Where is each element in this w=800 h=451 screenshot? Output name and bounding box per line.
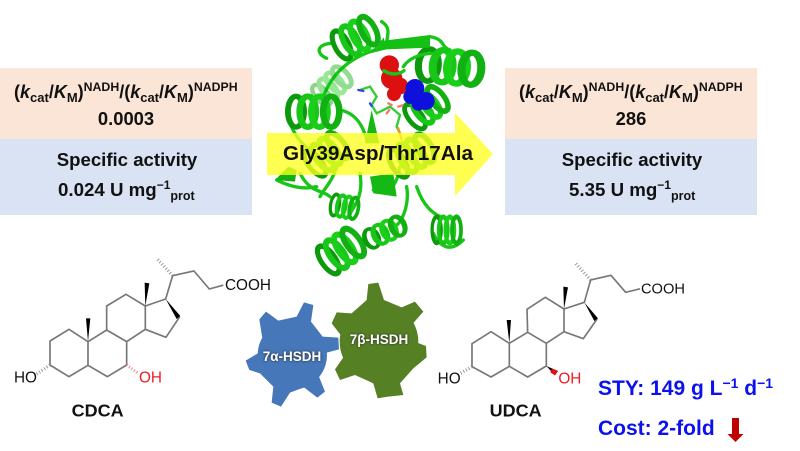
wild-type activity value: −1 xyxy=(157,178,171,192)
icon: down arrow xyxy=(728,418,744,442)
mutant selectivity ratio label: / xyxy=(554,82,559,102)
7α-HSDH label: 7α-HSDH xyxy=(263,349,321,364)
molecule: CDCA: COOH xyxy=(225,277,271,294)
callout: space-time yield: STY: 149 g L xyxy=(598,377,722,400)
mutant selectivity value: 286 xyxy=(616,108,646,129)
panel: wild-type specific activity xyxy=(0,139,252,215)
mutation arrow xyxy=(267,113,493,196)
panel: mutant specific activity xyxy=(505,139,757,215)
callout: space-time yield: −1 xyxy=(757,375,773,391)
ligand sticks xyxy=(358,87,403,140)
wild-type selectivity ratio label: K xyxy=(54,82,69,102)
panel: wild-type coenzyme preference xyxy=(0,68,252,139)
molecule: UDCA: COOH xyxy=(641,282,685,298)
wild-type selectivity ratio label: / xyxy=(49,82,54,102)
mutant selectivity ratio label: K xyxy=(669,82,684,102)
wild-type activity value: prot xyxy=(170,189,196,203)
wild-type activity value: 0.024 U mg xyxy=(58,179,157,200)
wild-type selectivity ratio label: k xyxy=(130,82,141,102)
CDCA label: CDCA xyxy=(72,401,124,421)
mutant selectivity ratio label: ) xyxy=(583,82,589,102)
mutant activity value: prot xyxy=(671,189,696,203)
mutant selectivity ratio label: M xyxy=(572,90,583,105)
wild-type selectivity ratio label: K xyxy=(164,82,179,102)
molecule: UDCA xyxy=(438,263,685,421)
mutant selectivity ratio label: NADH xyxy=(589,80,624,94)
mutant selectivity ratio label: cat xyxy=(645,90,665,105)
mutant selectivity ratio label: (k xyxy=(519,82,535,102)
mutant selectivity ratio label: ) xyxy=(693,82,699,102)
molecule: CDCA: HO xyxy=(14,369,37,386)
7β-HSDH label: 7β-HSDH xyxy=(350,332,408,347)
wild-type selectivity ratio label: NADH xyxy=(84,80,119,94)
wild-type selectivity ratio label: ) xyxy=(188,82,194,102)
mutant selectivity ratio label: M xyxy=(682,90,693,105)
wild-type selectivity ratio label: M xyxy=(177,90,188,105)
wild-type selectivity ratio label: cat xyxy=(140,90,160,105)
mutant selectivity ratio label: cat xyxy=(535,90,554,105)
callout: space-time yield: −1 xyxy=(722,375,739,391)
protein structure ribbon xyxy=(275,14,483,277)
molecule: CDCA xyxy=(14,258,271,421)
callout: space-time yield: d xyxy=(738,377,757,400)
wild-type selectivity ratio label: M xyxy=(67,90,78,105)
mutant selectivity ratio label: NADPH xyxy=(699,80,743,94)
mutation label: Gly39Asp/Thr17Ala xyxy=(283,143,474,165)
wild-type selectivity ratio label: /( xyxy=(119,82,130,102)
molecule: UDCA: HO xyxy=(438,370,461,387)
mutant activity value: 5.35 U mg xyxy=(569,179,657,200)
molecule: CDCA: OH xyxy=(139,370,162,387)
wild-type selectivity ratio label: / xyxy=(159,82,164,102)
mutant selectivity ratio label: / xyxy=(664,82,669,102)
gear: 7β-HSDH xyxy=(332,283,427,398)
panel: mutant coenzyme preference xyxy=(505,68,757,139)
UDCA label: UDCA xyxy=(490,401,542,421)
mutant activity heading: Specific activity xyxy=(562,149,703,170)
callout: cost reduction: Cost: 2-fold xyxy=(598,417,715,440)
wild-type selectivity value: 0.0003 xyxy=(98,108,154,129)
mutant selectivity ratio label: k xyxy=(635,82,646,102)
beta sheet strand xyxy=(370,35,430,53)
red residue spheres xyxy=(380,55,408,101)
wild-type selectivity ratio label: ) xyxy=(78,82,84,102)
mutant selectivity ratio label: K xyxy=(559,82,574,102)
mutant selectivity ratio label: /( xyxy=(624,82,635,102)
molecule: UDCA: OH xyxy=(558,370,581,387)
mutant activity value: −1 xyxy=(657,178,671,192)
gear: 7α-HSDH xyxy=(246,302,339,407)
wild-type selectivity ratio label: (k xyxy=(14,82,30,102)
blue residue spheres xyxy=(403,79,435,111)
wild-type selectivity ratio label: NADPH xyxy=(194,80,238,94)
wild-type selectivity ratio label: cat xyxy=(30,90,49,105)
wild-type activity heading: Specific activity xyxy=(57,149,198,170)
